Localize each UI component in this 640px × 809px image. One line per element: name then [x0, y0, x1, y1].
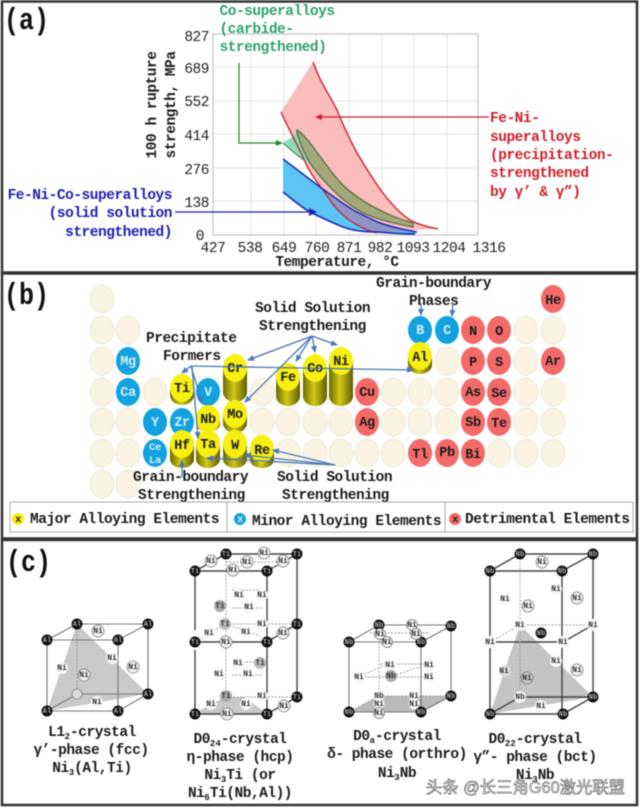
crystal: D024: Ni: [204, 629, 214, 638]
crystal: D0a: Nb: [447, 693, 455, 701]
label: solid solution strengthening top: Solid Solution: [255, 301, 370, 317]
legend: detrimental: x: [452, 515, 458, 526]
crystal: D0a: Ni: [409, 692, 419, 701]
major alloying elements: cylinders: Co: [307, 362, 323, 377]
caption: L12: L1: [48, 725, 65, 741]
crystal: D024: Ti: [191, 568, 199, 576]
crystal: D024: Ni: [243, 670, 253, 679]
arrows: solid solution bottom: [207, 450, 335, 465]
label: Fe-Ni-superalloys: (precipitation-: [490, 148, 613, 164]
caption: D024: Ni: [188, 786, 204, 802]
crystal: D0a: Ni: [354, 673, 364, 682]
major alloying elements: cylinders: Re: [254, 444, 270, 459]
label: precipitate formers: [146, 331, 236, 365]
caption: L12: -crystal: [70, 725, 137, 741]
crystal: D022: Nb: [537, 630, 545, 638]
legend: [10, 502, 633, 532]
arrow: blue: [175, 208, 317, 216]
detrimental elements: Bi: [465, 448, 481, 463]
caption: D0a: Nb: [400, 766, 417, 782]
crystal: D024: [190, 547, 302, 720]
crystal: D0a: Ni: [407, 621, 417, 630]
caption: D024: D0: [193, 732, 210, 748]
crystal: D0a: Nb: [345, 709, 353, 717]
y axis ticks: 138: [184, 196, 209, 212]
x axis ticks: [201, 241, 505, 257]
x axis ticks: 1093: [397, 241, 429, 257]
crystal: D024: Ti: [263, 711, 271, 719]
crystal: D024: Ti: [293, 694, 301, 702]
caption: D0a: [327, 729, 467, 783]
crystal: D022: Nb: [589, 694, 597, 702]
caption: D022: D0: [488, 732, 505, 748]
region: overlap: [325, 192, 406, 232]
caption: D022: Ni: [516, 768, 532, 784]
watermark: 头条 @长三角G60激光联盟: [426, 778, 625, 797]
detrimental elements: Te: [491, 417, 507, 432]
region: Co superalloys: [283, 131, 312, 165]
caption: D0a: a: [370, 736, 376, 746]
label: grain-boundary strengthening: Grain-boundary: [133, 470, 249, 486]
detrimental elements: Se: [491, 387, 507, 402]
curve: Fe-Ni-Co upper: [283, 159, 417, 232]
crystal: D022: Ni: [515, 621, 525, 630]
crystal: D024: Ni: [206, 700, 216, 709]
crystal: D024: Ti: [191, 711, 199, 719]
minor alloying elements: Ce: [149, 442, 161, 454]
panel label c: (c): [6, 546, 51, 581]
panel: c: [2, 540, 637, 805]
caption: D022: [473, 732, 597, 785]
crystal: D024: Ti: [263, 639, 271, 647]
major alloying elements: cylinders: Ni: [333, 355, 349, 370]
periodic table: empty cells: [90, 285, 565, 498]
detrimental elements: He: [545, 294, 561, 309]
crystal: D0a: Ni: [382, 638, 392, 647]
crystal: D022: Ni: [572, 594, 582, 603]
crystal: L12: Ni: [92, 698, 102, 707]
crystal: D024: Ni: [221, 638, 231, 647]
legend: minor: x: [237, 515, 243, 526]
arrow: grain-boundary strengthening: [181, 461, 183, 478]
crystal: D0a: Ni: [385, 661, 395, 670]
label: grain-boundary strengthening: Strengthening: [138, 488, 245, 504]
crystal: L12: Al: [43, 708, 51, 716]
caption: D024: Ti (or: [226, 768, 276, 784]
detrimental elements: Cu: [359, 386, 375, 401]
crystal: D022: Nb: [516, 551, 524, 559]
crystal: L12: Al: [144, 621, 152, 629]
label: Fe-Ni-superalloys: strengthened: [490, 166, 589, 182]
detrimental elements: Ar: [545, 355, 561, 370]
caption: D022: 22: [505, 739, 516, 749]
minor alloying elements: Ca: [120, 386, 136, 401]
curve: Fe-Ni-Co lower: [283, 192, 415, 234]
crystal: D0a: Nb: [417, 709, 425, 717]
crystal: D022: Ni: [551, 585, 561, 594]
crystal: D0a: Ni: [411, 630, 421, 639]
major alloying elements: cylinders: Hf: [174, 439, 190, 454]
x axis ticks: 1204: [433, 241, 465, 257]
detrimental elements: Tl: [412, 448, 428, 463]
crystal: D022: Ni: [522, 674, 532, 683]
caption: D022: γ”- phase (bct): [473, 750, 597, 766]
detrimental elements: [355, 285, 565, 467]
crystal: D0a: Nb: [375, 622, 383, 630]
crystal: D022: Ni: [499, 667, 509, 676]
crystal: D024: Ti: [191, 639, 199, 647]
minor alloying elements: [116, 316, 459, 467]
panel: b: [2, 274, 637, 538]
curve: Fe-Ni upper: [313, 62, 438, 229]
crystal: L12: Ni: [57, 664, 67, 673]
curve: Co lower: [283, 143, 304, 160]
chart: rupture strength vs temperature: [145, 30, 505, 271]
label: Fe-Ni-superalloys: [490, 111, 613, 201]
crystal: D0a: Nb: [345, 639, 353, 647]
minor alloying elements: Mg: [120, 355, 136, 370]
crystal: D024: Ni: [257, 620, 267, 629]
crystal: D022: Nb: [559, 711, 567, 719]
crystal: D024: Ni: [234, 591, 244, 600]
panel: a: [2, 2, 637, 272]
crystal: D0a: Nb: [417, 639, 425, 647]
label: Fe-Ni-Co-superalloys: strengthened): [65, 225, 172, 241]
y axis ticks: 552: [184, 95, 209, 111]
caption: D024: [187, 732, 293, 803]
crystal: D024: Ti: [220, 620, 230, 629]
crystal: D022: Ni: [523, 602, 533, 611]
y axis ticks: [184, 30, 209, 245]
label: grain-boundary phases: Grain-boundary: [376, 276, 492, 292]
y axis title: strength, MPa: [164, 51, 180, 158]
crystal: D0a: Nb: [374, 692, 384, 701]
crystal: D024: Ti: [222, 551, 230, 559]
crystal: L12: [42, 618, 154, 716]
crystal: D022: Nb: [515, 693, 525, 702]
caption: D0a: Ni: [378, 766, 394, 782]
crystal: D022: Ni: [485, 638, 495, 647]
caption: D024: Ni: [204, 768, 221, 784]
detrimental elements: Pb: [439, 446, 455, 461]
major alloying elements: cylinders: W: [231, 439, 240, 454]
crystal: D024: Ti: [293, 551, 301, 559]
major alloying elements: cylinders: Fe: [280, 371, 296, 386]
label: grain-boundary phases: [376, 276, 492, 310]
crystal: D022: Ni: [537, 558, 547, 567]
caption: D0a: δ- phase (orthro): [327, 747, 467, 763]
y axis ticks: 689: [184, 62, 209, 78]
crystal: D024: Ti: [255, 659, 265, 668]
region: Fe-Ni superalloys: [281, 62, 438, 233]
label: Fe-Ni-Co-superalloys: [8, 188, 172, 241]
caption: D024: -crystal: [221, 732, 287, 748]
crystal: D024: Ni: [257, 692, 267, 701]
crystal: D0a: [344, 620, 456, 718]
crystal: D024: Ni: [242, 558, 252, 567]
caption: D022: -crystal: [516, 732, 582, 748]
arrow: green: [239, 63, 283, 146]
x axis ticks: 427: [201, 241, 225, 257]
crystal: D0a: Ni: [374, 709, 384, 718]
crystal: D024: Ni: [279, 702, 289, 711]
y axis title: [145, 51, 180, 158]
crystal: D024: Ni: [278, 629, 288, 638]
detrimental elements: Ag: [359, 416, 375, 431]
crystal: D022: [484, 548, 599, 720]
crystal: D024: Ti: [221, 692, 231, 701]
crystal: D0a: Nb: [447, 623, 455, 631]
caption: D024: 6: [204, 793, 210, 803]
x axis title: Temperature, °C: [275, 255, 399, 271]
crystal: D024: Ni: [257, 591, 267, 600]
crystal: D022: Nb: [486, 711, 494, 719]
minor alloying elements: La: [149, 455, 162, 467]
label: Co-superalloys: (carbide-: [220, 22, 294, 38]
crystal: D024: Ti: [215, 602, 225, 611]
label: Co-superalloys: Co-superalloys: [220, 4, 335, 20]
y axis ticks: 276: [184, 163, 209, 179]
crystal: D024: Ni: [214, 670, 224, 679]
crystal: L12: Ni: [107, 654, 117, 663]
crystal: D022: Ni: [536, 702, 546, 711]
arrows: precipitate formers: [182, 366, 413, 438]
crystal: D0a: Nb: [386, 672, 396, 681]
detrimental elements: P: [469, 356, 477, 371]
crystal: D024: Ni: [222, 710, 232, 719]
crystal: L12: Al: [73, 621, 81, 629]
label: solid solution strengthening top: [255, 301, 370, 335]
minor alloying elements: Zr: [174, 416, 190, 431]
caption: L12: Ni: [52, 761, 69, 777]
label: Fe-Ni-superalloys: by γ’ & γ”): [490, 185, 580, 201]
label: precipitate formers: Precipitate: [146, 331, 236, 347]
major alloying elements: cylinders: Mo: [227, 408, 243, 423]
caption: D024: 24: [210, 739, 221, 749]
legend: major: Major Alloying Elements: [30, 512, 219, 528]
crystal: L12: Ni: [128, 663, 138, 672]
minor alloying elements: C: [443, 324, 451, 339]
caption: D0a: 3: [394, 773, 400, 783]
caption: D022: Nb: [538, 768, 555, 784]
major alloying elements: cylinders: Ti: [174, 382, 190, 397]
crystal: D022: Nb: [589, 551, 597, 559]
x axis ticks: 760: [305, 241, 329, 257]
label: Fe-Ni-superalloys: Fe-Ni-: [490, 111, 539, 127]
y axis ticks: 414: [184, 129, 209, 145]
caption: D0a: D0: [353, 729, 370, 745]
crystal: D022: Ni: [551, 657, 561, 666]
legend: minor: Minor Alloying Elements: [252, 514, 441, 530]
detrimental elements: As: [465, 386, 481, 401]
label: grain-boundary phases: Phases: [409, 294, 458, 310]
arrows: grain-boundary phases: [421, 303, 453, 316]
minor alloying elements: B: [416, 324, 424, 339]
crystal: D022: Nb: [486, 568, 494, 576]
major alloying elements: cylinders: Ta: [200, 438, 216, 453]
caption: D024: 3: [221, 775, 226, 785]
crystal: D024: Ti: [293, 621, 301, 629]
label: Co-superalloys: strengthened): [220, 40, 326, 56]
crystal: D022: Nb: [558, 568, 566, 576]
crystal: D022: Ni: [588, 621, 598, 630]
x axis ticks: 871: [337, 241, 361, 257]
caption: D024: Ti(Nb,Al)): [210, 786, 292, 802]
major alloying elements: cylinders: Al: [412, 351, 428, 366]
crystal: D024: Ti: [263, 568, 271, 576]
crystal: L12: Al: [114, 637, 122, 645]
caption: L12: 3: [69, 768, 74, 778]
detrimental elements: S: [495, 356, 503, 371]
crystal: L12: Al: [144, 691, 152, 699]
label: Co-superalloys: [220, 4, 335, 56]
arrows: solid solution top: [245, 336, 337, 402]
x axis ticks: 1316: [473, 241, 505, 257]
x axis ticks: 982: [368, 241, 392, 257]
region: Fe-Ni-Co superalloys: [283, 159, 417, 234]
label: grain-boundary strengthening: [133, 470, 249, 504]
crystal: L12: Al: [43, 637, 51, 645]
caption: D024: η-phase (hcp): [187, 750, 293, 766]
region: carbide overlap band: [297, 130, 413, 227]
major alloying elements: cylinders: Nb: [200, 413, 216, 428]
x axis ticks: 649: [272, 241, 296, 257]
crystal: D024: Ni: [228, 566, 238, 575]
crystal: D024: Ni: [206, 557, 216, 566]
arrow: red: [315, 114, 489, 120]
crystal: L12: Al: [114, 708, 122, 716]
crystal: D0a: Ni: [374, 700, 384, 709]
detrimental elements: N: [469, 325, 477, 340]
label: Fe-Ni-superalloys: superalloys: [490, 130, 580, 146]
minor alloying elements: Y: [151, 416, 160, 431]
label: solid solution strengthening bottom: Solid Solution: [277, 470, 392, 486]
panel label b: (b): [4, 279, 49, 314]
crystal: D024: Ni: [241, 700, 251, 709]
crystal: D024: Ni: [233, 659, 243, 668]
legend: detrimental: Detrimental Elements: [465, 512, 629, 528]
crystal: D022: Ni: [572, 666, 582, 675]
label: Fe-Ni-Co-superalloys: (solid solution: [49, 206, 172, 222]
detrimental elements: O: [495, 325, 503, 340]
y axis ticks: 827: [184, 30, 209, 46]
crystal: D0a: Ni: [424, 661, 434, 670]
crystal: D0a: Ni: [409, 700, 419, 709]
crystal: D0a: Ni: [375, 630, 385, 639]
caption: L12: (Al,Ti): [74, 761, 132, 777]
crystal: D024: Ni: [259, 549, 269, 558]
crystal: D022: Ni: [500, 595, 510, 604]
caption: D022: 3: [532, 775, 538, 785]
x axis ticks: 538: [238, 241, 262, 257]
crystal: D0a: Ni: [424, 673, 434, 682]
caption: L12: 2: [65, 732, 70, 742]
crystal: D024: Ni: [244, 603, 254, 612]
minor alloying elements: V: [204, 386, 213, 401]
crystal: D022: Ni: [558, 638, 568, 647]
crystal: L12: Ni: [79, 671, 89, 680]
label: precipitate formers: Formers: [163, 349, 221, 365]
crystal: L12: Ni: [93, 627, 103, 636]
y axis ticks: 0: [196, 229, 204, 245]
major alloying elements: cylinders: [170, 342, 432, 468]
major alloying elements: cylinders: Cr: [227, 362, 243, 377]
caption: L12: γ’-phase (fcc): [33, 743, 149, 759]
crystal: D024: Ni: [241, 628, 251, 637]
label: solid solution strengthening bottom: [277, 470, 392, 504]
label: Fe-Ni-Co-superalloys: Fe-Ni-Co-superalloys: [8, 188, 172, 204]
label: solid solution strengthening bottom: Strengthening: [282, 488, 389, 504]
crystal: D024: Ni: [278, 557, 288, 566]
caption: L12: [33, 725, 149, 778]
caption: D0a: -crystal: [375, 729, 442, 745]
curve: Fe-Ni lower: [281, 112, 377, 233]
label: solid solution strengthening top: Strengthening: [259, 319, 366, 335]
y axis title: 100 h rupture: [145, 52, 161, 158]
legend: major: x: [15, 515, 21, 526]
detrimental elements: Sb: [465, 416, 481, 431]
panel label a: (a): [4, 4, 49, 39]
